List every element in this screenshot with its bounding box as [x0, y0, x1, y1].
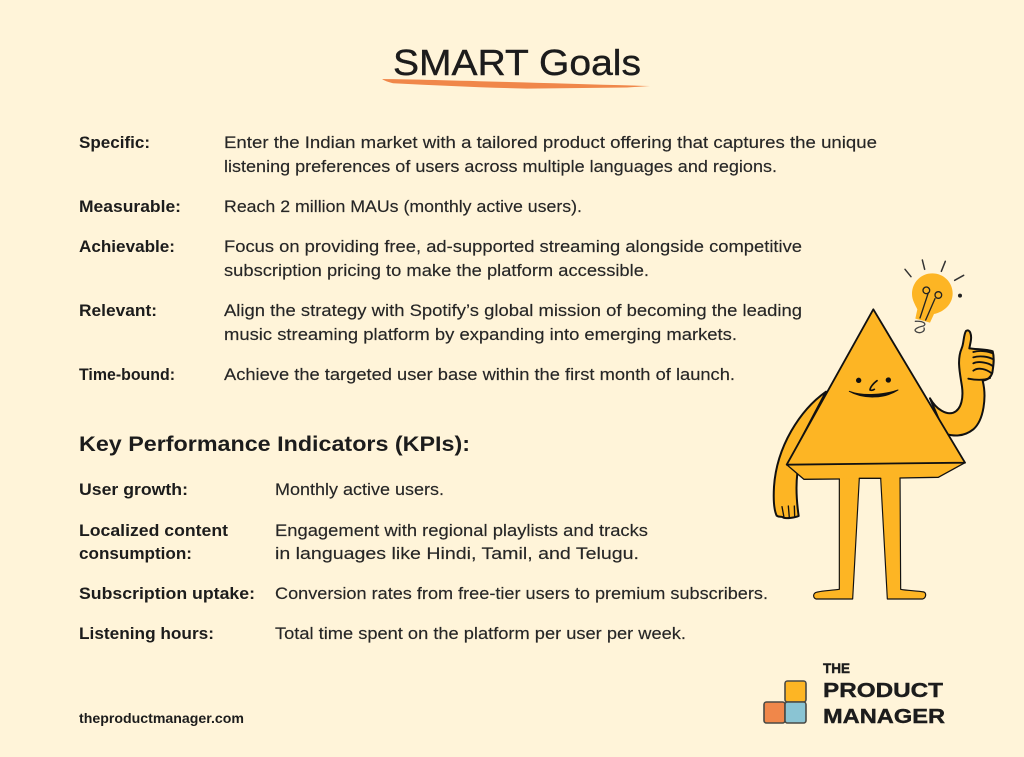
specific: listening preferences of users across multiple languages and regions. — [224, 157, 777, 176]
relevant: Relevant: — [79, 302, 157, 320]
icon: triangle mascot with light bulb — [774, 260, 994, 599]
achievable: Focus on providing free, ad-supported streaming alongside competitive — [224, 237, 802, 256]
logo icon blocks — [764, 681, 806, 723]
title underline brush stroke — [382, 79, 650, 89]
relevant: music streaming platform by expanding into emerging markets. — [224, 325, 737, 344]
left arm — [774, 392, 826, 518]
listening hours: Total time spent on the platform per user per week. — [275, 624, 686, 643]
legs — [814, 472, 926, 599]
logo wordmark — [823, 661, 945, 728]
measurable: Reach 2 million MAUs (monthly active users). — [224, 197, 582, 216]
listening hours — [79, 624, 686, 643]
achievable — [79, 237, 802, 280]
user growth — [79, 480, 444, 499]
achievable: Achievable: — [79, 238, 175, 256]
user growth: User growth: — [79, 481, 188, 499]
localized content consumption: in languages like Hindi, Tamil, and Telugu. — [275, 544, 639, 563]
user growth: Monthly active users. — [275, 480, 444, 499]
localized content consumption: Localized content — [79, 522, 229, 540]
triangle body — [787, 309, 965, 465]
localized content consumption — [79, 521, 648, 563]
KPI list — [79, 480, 768, 643]
subscription uptake — [79, 584, 768, 603]
subscription uptake: Subscription uptake: — [79, 585, 255, 603]
logo — [764, 661, 945, 728]
specific: Specific: — [79, 134, 150, 152]
logo wordmark: PRODUCT — [823, 679, 944, 702]
logo wordmark: THE — [823, 661, 850, 676]
relevant: Align the strategy with Spotify’s global mission of becoming the leading — [224, 301, 802, 320]
logo wordmark: MANAGER — [823, 705, 945, 728]
triangle underside — [787, 463, 965, 479]
achievable: subscription pricing to make the platform accessible. — [224, 261, 649, 280]
KPI heading: Key Performance Indicators (KPIs): — [79, 432, 470, 456]
SMART goals list — [79, 133, 877, 384]
relevant — [79, 301, 802, 344]
website footer: theproductmanager.com — [79, 711, 244, 726]
specific — [79, 133, 877, 176]
face — [849, 377, 898, 397]
measurable — [79, 197, 582, 216]
specific: Enter the Indian market with a tailored product offering that captures the unique — [224, 133, 877, 152]
right arm with thumbs up — [930, 330, 994, 436]
measurable: Measurable: — [79, 198, 181, 216]
localized content consumption: Engagement with regional playlists and tracks — [275, 521, 648, 540]
time-bound: Time-bound: — [79, 366, 175, 384]
subscription uptake: Conversion rates from free-tier users to premium subscribers. — [275, 584, 768, 603]
icon: light bulb — [905, 260, 964, 333]
localized content consumption: consumption: — [79, 545, 192, 563]
listening hours: Listening hours: — [79, 625, 214, 643]
title: SMART Goals — [393, 42, 641, 83]
time-bound: Achieve the targeted user base within the first month of launch. — [224, 365, 735, 384]
